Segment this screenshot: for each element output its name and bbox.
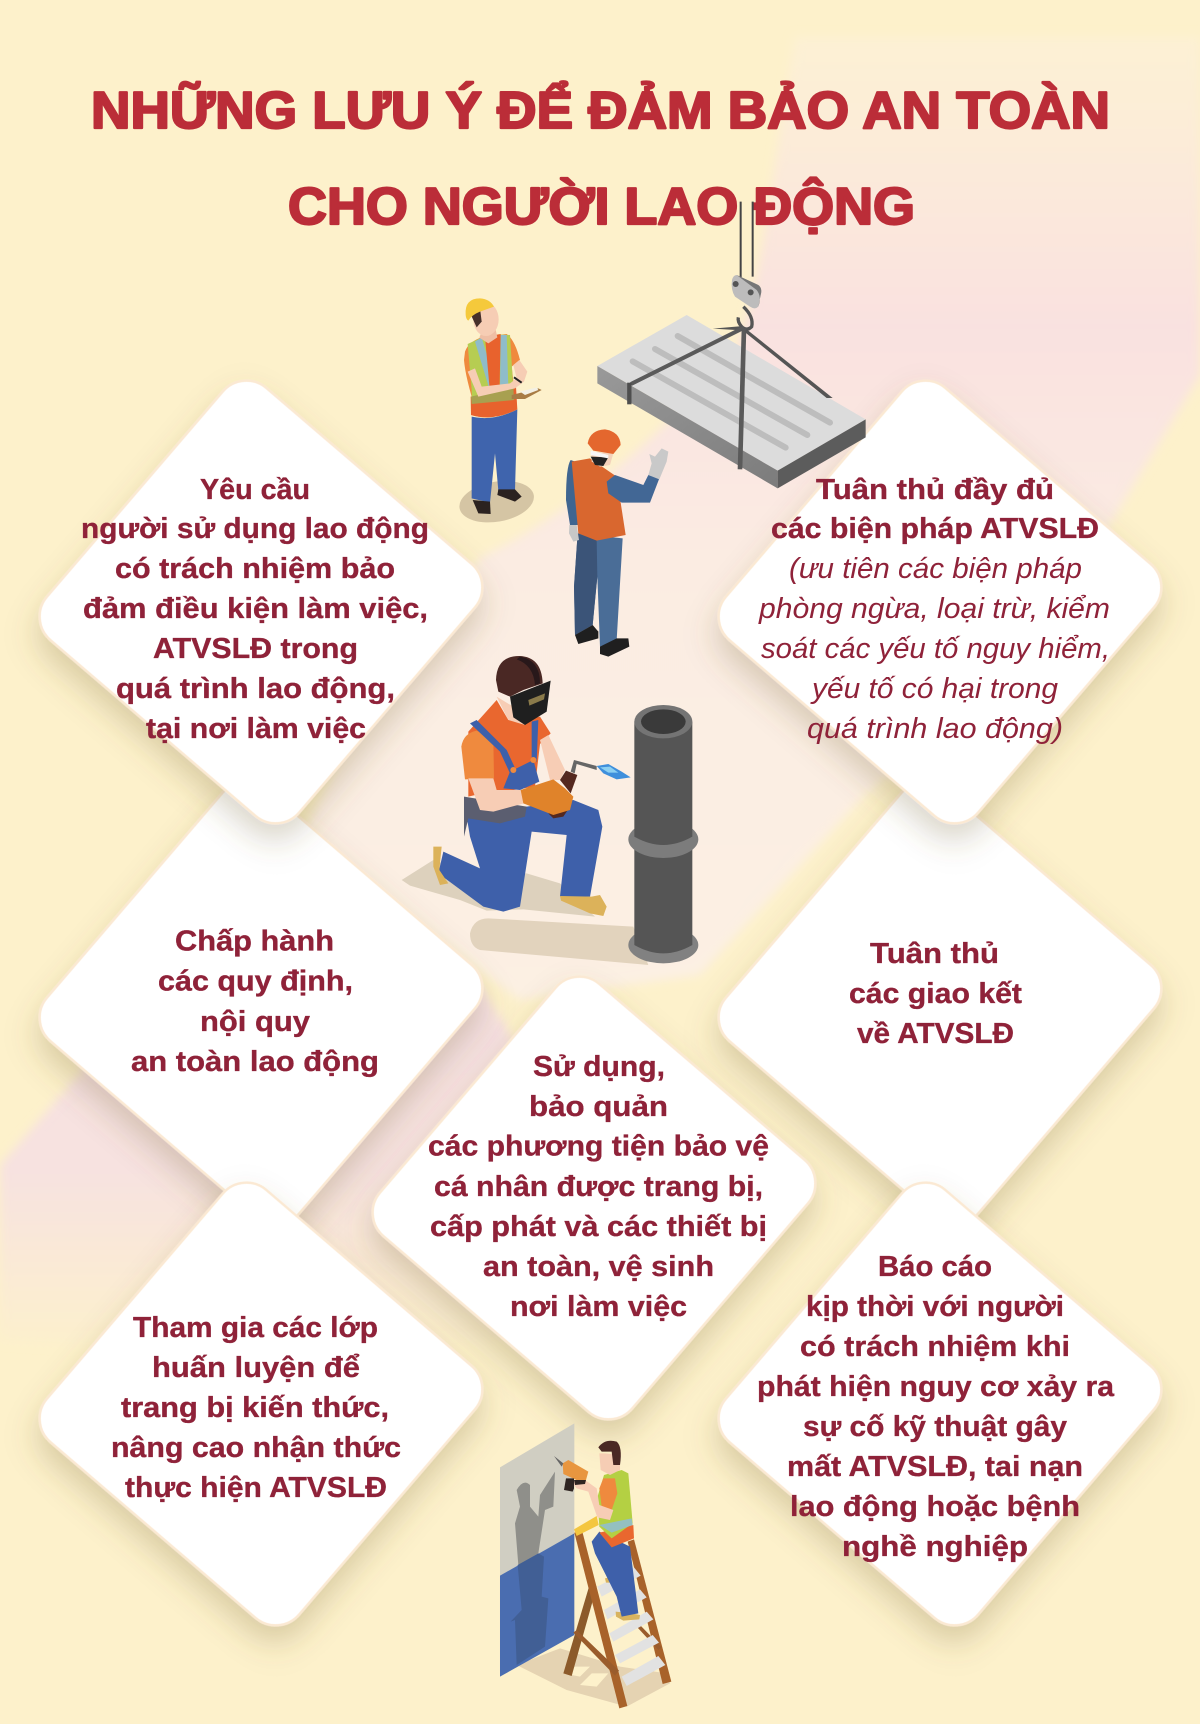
panel: employer responsibility: có trách nhiệm bảo	[115, 553, 395, 585]
panel: timely reporting: phát hiện nguy cơ xảy ra	[757, 1371, 1115, 1403]
title: NHỮNG LƯU Ý ĐỂ ĐẢM BẢO AN TOÀN	[91, 81, 1110, 140]
panel: safety agreements	[706, 769, 1174, 1237]
panel: comply with measures: quá trình lao động)	[807, 713, 1063, 745]
panel: safety agreements: các giao kết	[849, 978, 1023, 1010]
panel: timely reporting: nghề nghiệp	[842, 1531, 1028, 1563]
panel: rules and regulations: an toàn lao động	[131, 1046, 379, 1078]
panel: comply with measures	[706, 368, 1174, 836]
panel: comply with measures: (ưu tiên các biện pháp	[789, 553, 1082, 585]
panel: protective equipment: cấp phát và các thiết bị	[430, 1211, 767, 1243]
panel: safety agreements: Tuân thủ	[870, 938, 999, 970]
panel: employer responsibility	[27, 368, 495, 836]
icon: worker drilling on ladder	[500, 1423, 671, 1708]
panel: protective equipment	[360, 964, 828, 1432]
panel: employer responsibility: ATVSLĐ trong	[153, 633, 358, 665]
panel: employer responsibility: người sử dụng lao động	[81, 513, 429, 545]
panel: comply with measures: yếu tố có hại trong	[810, 673, 1058, 705]
panel: timely reporting	[706, 1170, 1174, 1638]
panel: protective equipment: cá nhân được trang bị,	[434, 1171, 763, 1203]
panel: rules and regulations: nội quy	[200, 1006, 310, 1038]
panel: training: trang bị kiến thức,	[121, 1392, 389, 1424]
panel: timely reporting: sự cố kỹ thuật gây	[803, 1411, 1067, 1443]
panel: employer responsibility: quá trình lao động,	[116, 673, 395, 705]
panel: timely reporting: lao động hoặc bệnh	[790, 1491, 1080, 1523]
panel: rules and regulations: các quy định,	[158, 966, 353, 998]
panel: timely reporting: Báo cáo	[878, 1251, 992, 1283]
panel: protective equipment: Sử dụng,	[533, 1051, 665, 1083]
icon: worker signalling with raised hand	[566, 429, 668, 657]
title: CHO NGƯỜI LAO ĐỘNG	[288, 177, 915, 236]
panel: rules and regulations	[27, 769, 495, 1237]
panel: protective equipment: nơi làm việc	[510, 1291, 687, 1323]
title	[91, 81, 1110, 236]
panel: training	[27, 1170, 495, 1638]
panel: safety agreements: về ATVSLĐ	[857, 1018, 1014, 1050]
panel: employer responsibility: tại nơi làm việc	[146, 713, 366, 745]
panel: protective equipment: an toàn, vệ sinh	[483, 1251, 714, 1283]
panel: protective equipment: các phương tiện bảo vệ	[428, 1130, 769, 1162]
panel: comply with measures: Tuân thủ đầy đủ	[816, 474, 1054, 506]
panel: employer responsibility: Yêu cầu	[200, 474, 310, 506]
panel: protective equipment: bảo quản	[529, 1091, 668, 1123]
panel: training: huấn luyện để	[152, 1352, 360, 1384]
panel: timely reporting: có trách nhiệm khi	[800, 1331, 1070, 1363]
panel: timely reporting: kịp thời với người	[806, 1291, 1064, 1323]
icon: welder and steel pipe	[402, 656, 698, 965]
panel: rules and regulations: Chấp hành	[175, 926, 334, 958]
panel: comply with measures: soát các yếu tố nguy hiểm,	[761, 633, 1110, 665]
icon: supervisor with clipboard	[456, 298, 542, 528]
panel: training: Tham gia các lớp	[133, 1312, 378, 1344]
panel: comply with measures: phòng ngừa, loại trừ, kiểm	[758, 593, 1110, 625]
icon: crane hook and concrete slab	[597, 202, 866, 488]
panel: timely reporting: mất ATVSLĐ, tai nạn	[787, 1451, 1083, 1483]
panel: training: nâng cao nhận thức	[111, 1432, 401, 1464]
panel: training: thực hiện ATVSLĐ	[125, 1472, 387, 1504]
panel: employer responsibility: đảm điều kiện làm việc,	[83, 593, 428, 625]
panel: comply with measures: các biện pháp ATVSLĐ	[771, 513, 1099, 545]
